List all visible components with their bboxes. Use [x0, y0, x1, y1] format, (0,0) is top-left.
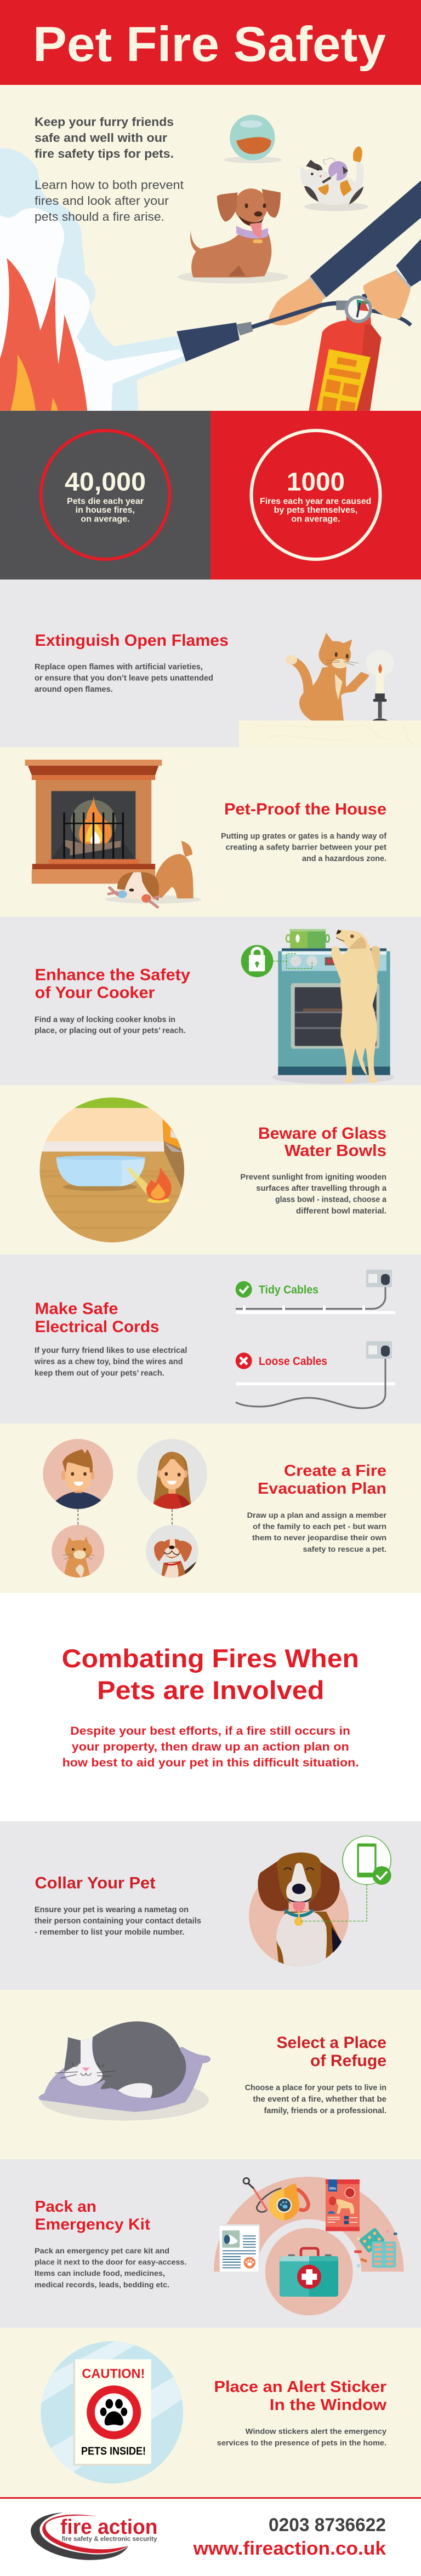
heading	[35, 1300, 159, 1336]
body text	[35, 663, 213, 694]
stat caption: Fires each year are caused	[260, 497, 371, 506]
sticker pets inside text: PETS INSIDE!	[81, 2445, 146, 2458]
body text: Find a way of locking cooker knobs in	[35, 1016, 175, 1024]
phone badge	[343, 1836, 391, 1885]
panel: make safe electrical cords	[0, 1254, 421, 1424]
pet food bag	[326, 2179, 360, 2231]
heading: Extinguish Open Flames	[35, 632, 229, 650]
logo swoosh	[31, 2512, 128, 2560]
stat ring	[251, 431, 380, 559]
woman avatar	[137, 1439, 207, 1512]
wall socket	[366, 1341, 392, 1359]
flames	[0, 258, 87, 411]
heading	[214, 2378, 386, 2414]
body text: Items can include food, medicines,	[35, 2269, 165, 2277]
logo tagline: fire safety & electronic security	[62, 2536, 157, 2543]
illustration: cat on pillow	[38, 2021, 210, 2121]
body text: Pack an emergency pet care kit and	[35, 2247, 169, 2255]
pillow	[38, 2047, 210, 2112]
cat avatar	[52, 1525, 104, 1579]
paw print	[100, 2399, 127, 2425]
body text: glass bowl - instead, choose a	[275, 1196, 387, 1204]
sticker caution text: CAUTION!	[82, 2366, 145, 2382]
body text: Window stickers alert the emergency	[246, 2428, 386, 2436]
intro heading text	[35, 115, 174, 160]
cat	[55, 2021, 186, 2098]
body text: - remember to list your mobile number.	[35, 1928, 184, 1937]
first aid kit	[265, 2228, 353, 2315]
body text: the event of a fire, whether that be	[253, 2095, 386, 2104]
label: Tidy Cables	[259, 1283, 318, 1296]
body text	[217, 2428, 386, 2447]
cat	[286, 633, 369, 721]
dog	[331, 930, 380, 1083]
body text: place, or placing out of your pets’ reach.	[35, 1026, 185, 1035]
table	[239, 721, 421, 747]
cross badge	[236, 1353, 252, 1369]
illustration: emergency kit items	[214, 2177, 404, 2315]
body text	[34, 1346, 187, 1378]
candle	[366, 650, 394, 721]
shadow	[41, 2079, 209, 2121]
heading: of Refuge	[310, 2052, 386, 2070]
cat with yarn	[300, 146, 368, 211]
medical record	[220, 2224, 260, 2272]
body text	[35, 1906, 201, 1937]
lead reel	[243, 2178, 308, 2220]
stat caption: Pets die each year	[67, 497, 144, 506]
dog	[178, 188, 288, 284]
check badge	[236, 1281, 252, 1298]
panel: intro hero	[0, 85, 421, 411]
body text: Replace open flames with artificial varieties,	[35, 663, 203, 672]
sunlight beam and flame	[126, 1167, 172, 1203]
heading: Place an Alert Sticker	[214, 2378, 386, 2396]
section heading	[62, 1644, 359, 1705]
illustration: fireplace and dog	[25, 760, 201, 908]
heading: Enhance the Safety	[35, 966, 190, 984]
panel: statistic 40,000	[0, 411, 210, 580]
intro heading text: safe and well with our	[35, 131, 167, 145]
bowl	[56, 1156, 145, 1191]
dog portrait	[249, 1852, 349, 1970]
shelf and loose cable	[236, 1356, 395, 1408]
stat caption: by pets themselves,	[274, 506, 357, 515]
body text: Putting up grates or gates is a handy way of	[221, 832, 386, 841]
body text: their person containing your contact details	[35, 1917, 201, 1925]
heading: Create a Fire	[284, 1462, 386, 1480]
heading: of Your Cooker	[35, 984, 155, 1002]
connector lines	[78, 1510, 172, 1525]
heading	[276, 2034, 386, 2070]
website: www.fireaction.co.uk	[193, 2538, 386, 2559]
stat number: 40,000	[65, 467, 146, 496]
dashed connector	[301, 1885, 367, 1921]
pot	[286, 929, 329, 948]
arch background	[214, 2177, 404, 2271]
section heading: Pets are Involved	[97, 1676, 325, 1705]
body text: safety to rescue a pet.	[303, 1545, 386, 1553]
body text	[245, 2084, 386, 2115]
body text	[221, 832, 386, 863]
logo wordmark: fire action	[60, 2516, 158, 2539]
heading: Water Bowls	[285, 1142, 386, 1160]
body text	[35, 1016, 185, 1035]
panel: collar your pet	[0, 1821, 421, 1990]
body text: Ensure your pet is wearing a nametag on	[35, 1906, 189, 1914]
body text	[240, 1173, 387, 1216]
man avatar	[43, 1439, 113, 1512]
arms and hands	[269, 181, 421, 325]
stat caption: in house fires,	[76, 506, 135, 515]
body text: or ensure that you don’t leave pets unattended	[35, 674, 213, 682]
heading: Evacuation Plan	[258, 1480, 386, 1498]
heading: Pet-Proof the House	[224, 800, 386, 818]
extinguisher	[309, 283, 412, 411]
heading: Pack an	[35, 2198, 96, 2216]
body text: around open flames.	[35, 685, 113, 694]
heading: Select a Place	[276, 2034, 386, 2052]
body text: place it next to the door for easy-access.	[35, 2258, 186, 2267]
panel: extinguish open flames	[0, 580, 421, 747]
illustration: dog with name tag	[249, 1836, 391, 1970]
body text: surfaces after travelling through a	[256, 1184, 387, 1193]
panel: footer	[0, 2497, 421, 2576]
section subheading	[62, 1725, 359, 1769]
shelf and clipped cable	[236, 1284, 395, 1314]
body text: family, friends or a professional.	[264, 2107, 386, 2115]
body text: If your furry friend likes to use electrical	[35, 1346, 187, 1355]
stat ring	[41, 431, 170, 559]
smoke cloud	[0, 148, 186, 411]
intro heading text: fire safety tips for pets.	[35, 147, 174, 160]
hero illustration	[0, 114, 421, 411]
heading: Beware of Glass	[258, 1125, 386, 1143]
heading	[35, 2198, 150, 2233]
wall socket	[366, 1270, 392, 1287]
intro body text: Learn how to both prevent	[35, 178, 184, 192]
pills	[354, 2227, 397, 2268]
title: Pet Fire Safety	[33, 18, 386, 72]
body text: Prevent sunlight from igniting wooden	[240, 1173, 386, 1182]
illustration: family and pets	[43, 1439, 207, 1579]
section subheading: Despite your best efforts, if a fire still occurs in	[70, 1725, 350, 1737]
dog with rope toy	[105, 841, 201, 908]
illustration: cooker and dog	[241, 929, 395, 1084]
stat number: 1000	[287, 467, 345, 496]
window	[40, 2339, 188, 2483]
body text: Choose a place for your pets to live in	[245, 2084, 386, 2092]
diagram: tidy cables	[236, 1270, 395, 1314]
intro body text: pets should a fire arise.	[35, 210, 164, 223]
illustration: glass bowl igniting wood	[38, 1095, 188, 1243]
heading: Make Safe	[35, 1300, 118, 1318]
heading: Collar Your Pet	[35, 1874, 156, 1892]
body text: different bowl material.	[296, 1207, 386, 1216]
body text: Draw up a plan and assign a member	[247, 1511, 387, 1519]
section heading: Combating Fires When	[62, 1644, 359, 1673]
heading	[258, 1462, 386, 1498]
intro body text: fires and look after your	[35, 194, 169, 208]
fireplace	[25, 760, 162, 883]
illustration: window sticker	[40, 2339, 188, 2483]
body text: of the family to each pet - but warn	[253, 1522, 386, 1530]
stat caption: on average.	[81, 515, 130, 524]
panel: pack an emergency kit	[0, 2159, 421, 2328]
panel: statistic 1000	[210, 411, 421, 580]
intro body text	[35, 178, 184, 223]
panel: pet-proof the house	[0, 747, 421, 917]
panel: beware of glass water bowls	[0, 1085, 421, 1254]
panel: select a place of refuge	[0, 1990, 421, 2159]
body text: wires as a chew toy, bind the wires and	[34, 1358, 183, 1367]
stat caption	[260, 497, 371, 524]
heading: In the Window	[270, 2396, 386, 2414]
hamster ball	[224, 114, 282, 163]
body text: medical records, leads, bedding etc.	[35, 2281, 169, 2289]
heading	[35, 966, 190, 1002]
pet food bag: 200s	[329, 2187, 337, 2190]
body text: them to never jeopardise their own	[252, 1534, 386, 1542]
body text	[35, 2247, 186, 2289]
sticker	[73, 2359, 151, 2466]
nozzle and hose	[177, 295, 372, 362]
illustration: cat and candle on table	[239, 633, 421, 747]
stat caption: on average.	[291, 515, 340, 524]
floor shadow	[272, 1070, 395, 1084]
panel: create a fire evacuation plan	[0, 1424, 421, 1593]
intro heading text: Keep your furry friends	[35, 115, 174, 129]
body text	[247, 1511, 387, 1553]
panel: enhance the safety of your cooker	[0, 917, 421, 1085]
body text: services to the presence of pets in the home.	[217, 2439, 386, 2447]
heading: Electrical Cords	[35, 1318, 159, 1336]
body text: and a hazardous zone.	[302, 854, 386, 863]
panel: combating fires intro	[0, 1593, 421, 1821]
cooker	[278, 948, 390, 1075]
stat caption	[67, 497, 144, 524]
body text: keep them out of your pets’ reach.	[35, 1369, 164, 1378]
diagram: loose cables	[236, 1341, 395, 1408]
dog avatar	[146, 1525, 198, 1579]
panel: alert sticker	[0, 2328, 421, 2497]
label: Loose Cables	[259, 1355, 327, 1368]
lock badge	[241, 945, 312, 977]
phone number: 0203 8736622	[269, 2515, 386, 2535]
section subheading: how best to aid your pet in this difficult situation.	[62, 1757, 359, 1769]
panel: title banner	[0, 0, 421, 85]
heading: Emergency Kit	[35, 2216, 150, 2233]
heading	[258, 1125, 386, 1160]
section subheading: your property, then draw up an action plan on	[72, 1741, 349, 1753]
body text: creating a safety barrier between your pet	[226, 844, 386, 852]
